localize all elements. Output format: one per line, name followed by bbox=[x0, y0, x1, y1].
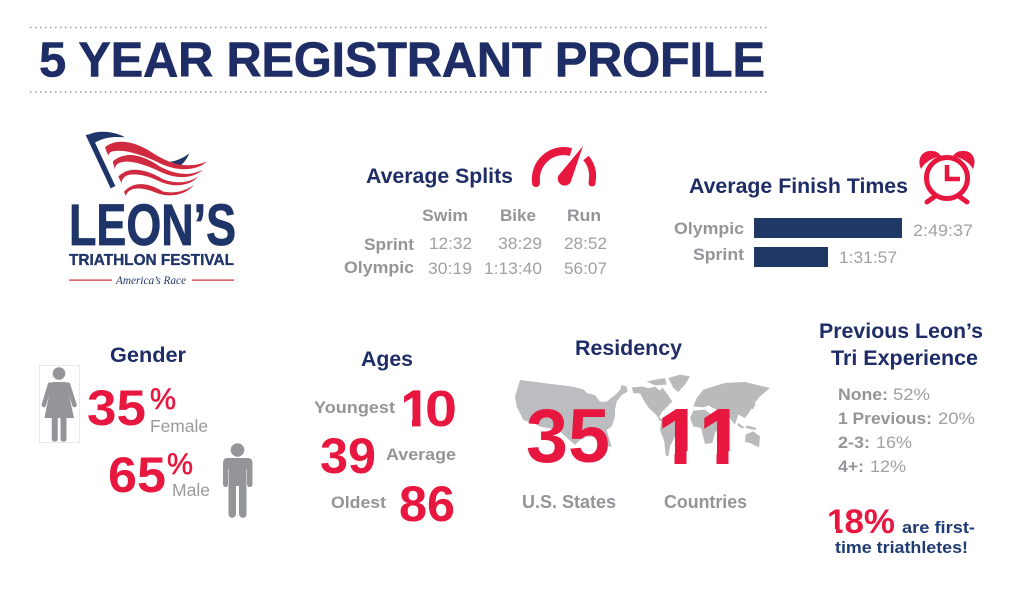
bar chart: finish times: Olympic bbox=[674, 219, 744, 238]
experience list: 12% bbox=[870, 457, 906, 476]
icon: female figure bbox=[40, 366, 80, 442]
experience list: 52% bbox=[893, 385, 930, 404]
stat: average 39: Average bbox=[386, 445, 456, 464]
experience list: 2-3: bbox=[838, 433, 870, 452]
stat: 11 countries bbox=[662, 409, 746, 508]
table column headers: Bike bbox=[500, 206, 536, 225]
table row: olympic: Olympic bbox=[344, 258, 414, 277]
table row: olympic: 1:13:40 bbox=[484, 259, 542, 278]
icon: male figure bbox=[223, 443, 252, 518]
stat: 35% female: 35 bbox=[87, 380, 146, 436]
callout: 18% first-time triathletes: are first- bbox=[902, 518, 975, 537]
table row: sprint: 38:29 bbox=[498, 234, 542, 253]
stat: youngest 10 bbox=[314, 390, 455, 426]
experience list: 4+: bbox=[838, 457, 864, 476]
panel: ages bbox=[314, 348, 457, 532]
table row: olympic: 56:07 bbox=[564, 259, 607, 278]
table row: sprint: 28:52 bbox=[564, 234, 607, 253]
stat: 65% male: 65 bbox=[108, 447, 166, 503]
heading: previous leon's tri experience: Previous Leon’s bbox=[819, 320, 983, 343]
stat: 65% male bbox=[108, 447, 210, 503]
stat: 35 U.S. states bbox=[522, 394, 616, 512]
experience list: 16% bbox=[876, 433, 912, 452]
experience list bbox=[838, 385, 975, 476]
heading: previous leon's tri experience: Tri Experience bbox=[831, 347, 978, 370]
stat: youngest 10: 1 bbox=[401, 380, 429, 437]
experience list: None: bbox=[838, 385, 888, 404]
heading: gender: Gender bbox=[110, 344, 186, 367]
stat: 65% male: % bbox=[167, 448, 193, 481]
stat: 11 countries: Countries bbox=[664, 492, 747, 512]
map: united states bbox=[515, 380, 628, 447]
panel: gender bbox=[40, 344, 252, 518]
stat: average 39 bbox=[320, 428, 456, 484]
table column headers: Swim bbox=[422, 206, 468, 225]
icon: waving flag bbox=[86, 132, 207, 196]
stat: oldest 86: Oldest bbox=[331, 493, 386, 512]
stat: oldest 86: 86 bbox=[399, 476, 455, 532]
heading: residency: Residency bbox=[575, 337, 682, 360]
heading: average finish times: Average Finish Times bbox=[689, 175, 908, 198]
table row: olympic bbox=[344, 258, 607, 278]
stat: oldest 86 bbox=[331, 476, 455, 532]
heading: previous leon's tri experience bbox=[819, 320, 983, 370]
stat: youngest 10: 0 bbox=[425, 380, 457, 437]
bar chart: finish times bbox=[674, 218, 973, 267]
table column headers: Run bbox=[567, 206, 601, 225]
panel: average splits bbox=[344, 146, 607, 278]
stat: 35% female: % bbox=[150, 383, 176, 416]
panel: previous tri experience bbox=[819, 320, 983, 557]
icon: alarm clock bbox=[919, 151, 975, 202]
stat: youngest 10: Youngest bbox=[314, 398, 395, 417]
table row: olympic: 30:19 bbox=[428, 259, 472, 278]
stat: 65% male: Male bbox=[172, 480, 210, 500]
bar chart: finish times: 1:31:57 bbox=[839, 248, 897, 267]
logo: Leon's Triathlon Festival bbox=[69, 132, 236, 287]
callout: 18% first-time triathletes: time triathletes! bbox=[835, 538, 968, 557]
callout: 18% first-time triathletes bbox=[829, 509, 974, 553]
panel: residency bbox=[515, 337, 770, 512]
callout: 18% first-time triathletes: 8% bbox=[844, 503, 895, 541]
logo wordmark: LEON’S bbox=[69, 194, 236, 258]
bar chart: finish times: 2:49:37 bbox=[913, 221, 973, 240]
stat: 35 U.S. states: U.S. States bbox=[522, 492, 616, 512]
heading: average splits: Average Splits bbox=[366, 165, 513, 188]
stat: average 39: 39 bbox=[320, 428, 376, 484]
stat: 11 countries: 1 bbox=[658, 394, 701, 480]
stat: 35% female: Female bbox=[150, 416, 208, 436]
panel: average finish times bbox=[674, 151, 975, 267]
icon: speedometer bbox=[532, 146, 596, 187]
stat: 11 countries: 1 bbox=[700, 394, 743, 480]
title: 5 YEAR REGISTRANT PROFILE bbox=[39, 34, 765, 88]
experience list: 1 Previous: bbox=[838, 409, 932, 428]
bar chart: finish times: Sprint bbox=[693, 245, 744, 264]
callout: 18% first-time triathletes: 1 bbox=[827, 503, 846, 541]
table column headers bbox=[422, 206, 601, 225]
heading: ages: Ages bbox=[361, 348, 413, 371]
table row: sprint bbox=[364, 234, 607, 254]
stat: 35 U.S. states: 35 bbox=[526, 394, 610, 479]
logo tagline: America’s Race bbox=[115, 273, 187, 287]
logo subtitle: TRIATHLON FESTIVAL bbox=[69, 252, 234, 269]
map: world bbox=[632, 375, 770, 456]
table row: sprint: 12:32 bbox=[429, 234, 472, 253]
experience list: 20% bbox=[938, 409, 975, 428]
stat: 35% female bbox=[87, 380, 208, 436]
table row: sprint: Sprint bbox=[364, 235, 414, 254]
